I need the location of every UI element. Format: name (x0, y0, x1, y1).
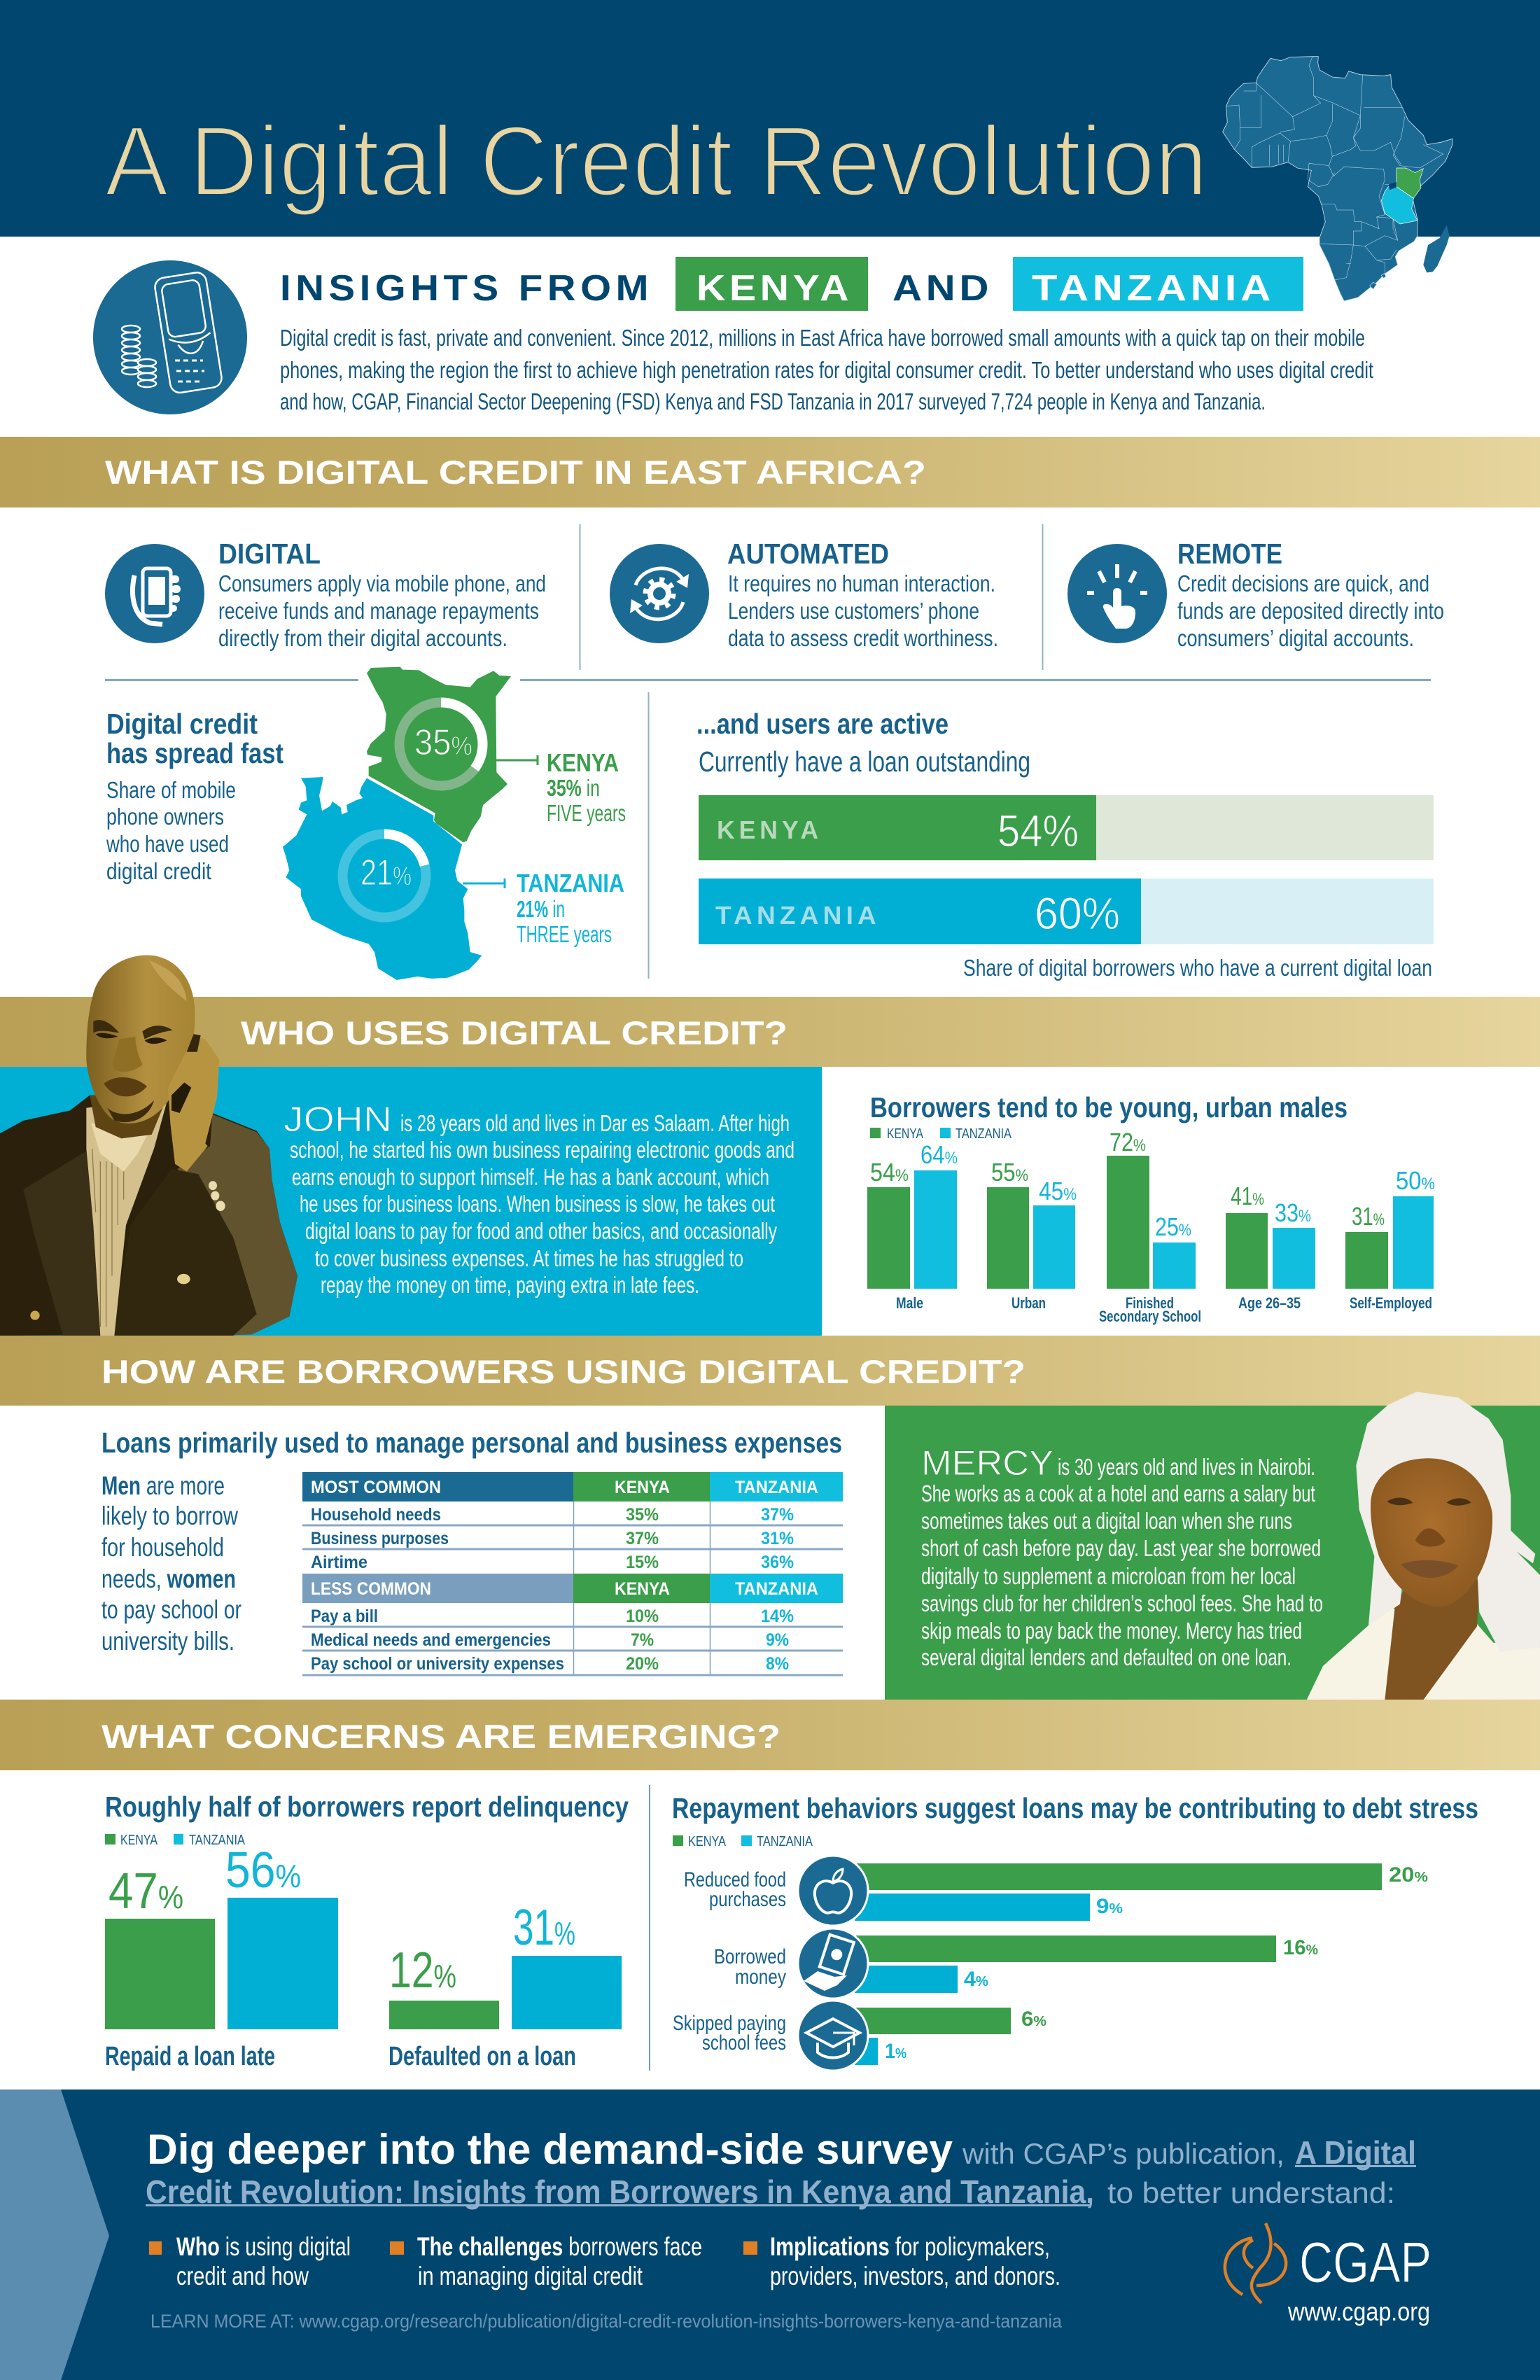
bullet: challenges: in managing digital credit (418, 2262, 643, 2290)
bars: Age 26-35: 41% (1231, 1182, 1264, 1210)
bullet: implications: providers, investors, and donors. (770, 2262, 1060, 2290)
footer heading: Dig deeper into the demand-side survey (147, 2126, 953, 2173)
row: medical needs: Medical needs and emergencies (311, 1630, 551, 1650)
panel: Mercy story: is 30 years old and lives in Nairobi. (1058, 1454, 1315, 1480)
bars: Finished secondary school: Secondary School (1099, 1308, 1201, 1325)
bars: borrowed money: 16% (1283, 1936, 1318, 1959)
legend (673, 1834, 813, 1849)
bar: Kenya 54% (699, 795, 1434, 860)
row: pay school: Pay school or university expenses (311, 1654, 564, 1674)
bars: reduced food: purchases (709, 1888, 786, 1911)
chart: borrowers young urban male (867, 1091, 1435, 1325)
row: pay a bill: 10% (626, 1606, 659, 1626)
panel: automated: AUTOMATED (727, 538, 889, 570)
map highlight: Kenya (1396, 168, 1423, 198)
section band: what concerns: WHAT CONCERNS ARE EMERGING? (102, 1718, 780, 1755)
bar: Tanzania 60%: 60% (1035, 888, 1120, 939)
bars: Age 26-35: Age 26–35 (1238, 1294, 1301, 1312)
section band: what is digital credit (0, 437, 1540, 507)
row: pay a bill: Pay a bill (311, 1606, 378, 1626)
bullet: who: credit and how (176, 2262, 309, 2290)
table: loan uses: KENYA (615, 1579, 670, 1599)
table: loan uses: TANZANIA (735, 1579, 818, 1599)
row: household needs: 35% (626, 1505, 659, 1525)
map: Africa (1223, 57, 1452, 301)
row: pay a bill (311, 1606, 794, 1626)
subtitle: insights from Kenya and Tanzania: AND (892, 268, 993, 309)
bars: skipped school fees: Skipped paying (673, 2012, 786, 2035)
text: men and women: for household (102, 1533, 224, 1562)
panel: Mercy story: several digital lenders and defaulted on one loan. (921, 1644, 1292, 1670)
bars: skipped school fees (673, 2001, 1046, 2071)
row: medical needs: 9% (766, 1630, 789, 1650)
table: loan uses: KENYA (615, 1478, 670, 1497)
bullet: who: Who is using digital (176, 2232, 351, 2261)
panel: Mercy story: She works as a cook at a hotel and earns a salary but (921, 1480, 1315, 1506)
bar: Kenya 54%: 54% (997, 806, 1079, 856)
chart: repayment behaviours (672, 1792, 1478, 2071)
panel: automated: data to assess credit worthiness. (728, 625, 998, 651)
bars: Male: 54% (870, 1158, 909, 1186)
bars: Self-employed (1345, 1166, 1435, 1312)
chart: borrowers young urban male: Borrowers tend to be young, urban males (870, 1091, 1348, 1124)
panel: digital: receive funds and manage repayments (218, 598, 539, 624)
footer heading: to better understand: (1107, 2176, 1395, 2209)
section band: what is digital credit: WHAT IS DIGITAL CREDIT IN EAST AFRICA? (105, 454, 926, 491)
photo: John (0, 955, 298, 1336)
panel: automated: It requires no human interaction. (728, 570, 995, 596)
bar: Tanzania 60%: TANZANIA (715, 901, 881, 930)
panel: digital: directly from their digital accounts. (218, 625, 507, 651)
panel: John story: school, he started his own business repairing electronic goods and (290, 1137, 794, 1163)
panel: John story: repay the money on time, paying extra in late fees. (321, 1272, 699, 1298)
legend (870, 1126, 1012, 1142)
heading: loans primarily used: Loans primarily used to manage personal and business expenses (102, 1427, 842, 1459)
panel: Mercy story: MERCY (921, 1443, 1054, 1483)
legend: TANZANIA (189, 1833, 246, 1848)
text: digital credit has spread fast: phone owners (106, 804, 224, 830)
chart: users are active (696, 708, 1434, 981)
row: business purposes: 31% (761, 1529, 794, 1548)
bars: Age 26-35 (1226, 1182, 1315, 1312)
row: household needs: 37% (761, 1505, 794, 1525)
row: business purposes (311, 1529, 794, 1548)
map: Kenya with donut (367, 667, 511, 842)
panel: John story: digital loans to pay for food and other basics, and occasionally (305, 1218, 777, 1244)
text: digital credit has spread fast (106, 708, 284, 884)
table: loan uses: MOST COMMON (311, 1478, 441, 1497)
bullet: who (149, 2232, 351, 2290)
chart: delinquency (105, 1791, 629, 2071)
bars: skipped school fees: 1% (885, 2040, 906, 2063)
legend: KENYA (887, 1126, 924, 1142)
intro text (280, 325, 1373, 414)
bars: reduced food (684, 1856, 1428, 1926)
icon: gear with arrows (610, 544, 709, 643)
bars: borrowed money: 4% (964, 1968, 988, 1991)
table: loan uses (302, 1472, 843, 1675)
callout: Kenya: FIVE years (547, 800, 626, 826)
row: business purposes: 37% (626, 1529, 659, 1548)
logo: CGAP (1225, 2223, 1432, 2326)
bars: Finished secondary school: 25% (1155, 1212, 1191, 1241)
footer heading: with CGAP’s publication, (962, 2137, 1284, 2170)
text: men and women: likely to borrow (102, 1502, 238, 1530)
row: household needs: Household needs (311, 1505, 441, 1525)
row: pay a bill: 14% (761, 1606, 794, 1626)
chart: delinquency: Roughly half of borrowers report delinquency (105, 1791, 629, 1823)
bars: Self-employed: 50% (1396, 1166, 1435, 1195)
table: loan uses: LESS COMMON (311, 1579, 431, 1599)
icon: apple (798, 1856, 868, 1926)
panel: Mercy story: short of cash before pay day. Last year she borrowed (921, 1535, 1321, 1561)
footer heading: Credit Revolution: Insights from Borrowers in Kenya and Tanzania, (146, 2174, 1094, 2210)
panel: automated: Lenders use customers’ phone (728, 598, 979, 624)
row: airtime: Airtime (311, 1553, 368, 1572)
legend: TANZANIA (757, 1834, 813, 1849)
photo: Mercy (1307, 1392, 1540, 1700)
subtitle: insights from Kenya and Tanzania: KENYA (696, 268, 853, 309)
logo: CGAP: www.cgap.org (1287, 2297, 1430, 2326)
row: business purposes: Business purposes (311, 1529, 449, 1548)
bars: defaulted: 31% (513, 1900, 575, 1956)
subtitle: insights from Kenya and Tanzania: TANZANIA (1032, 268, 1275, 309)
bars: Finished secondary school: Finished (1126, 1294, 1174, 1312)
bars: skipped school fees: school fees (702, 2031, 786, 2054)
map: Kenya with donut: 35% (414, 722, 472, 763)
text: digital credit has spread fast: has spread fast (106, 737, 284, 769)
text: men and women: university bills. (102, 1627, 234, 1656)
section band: who uses digital credit: WHO USES DIGITAL CREDIT? (241, 1014, 788, 1051)
row: airtime (311, 1553, 794, 1572)
arrow (0, 2090, 109, 2380)
callout: Kenya: 35% in (547, 775, 600, 801)
chart: users are active: Share of digital borrowers who have a current digital loan (963, 955, 1432, 981)
footer heading: A Digital (1295, 2134, 1416, 2171)
bars: borrowed money: Borrowed (714, 1945, 786, 1968)
panel: automated (610, 538, 998, 651)
panel: remote: REMOTE (1177, 538, 1282, 570)
bars: Age 26-35: 33% (1275, 1198, 1311, 1227)
bars: reduced food: 20% (1389, 1863, 1428, 1886)
bars: repaid late: Repaid a loan late (105, 2042, 275, 2071)
bars: Male: Male (896, 1294, 923, 1312)
panel: remote: consumers’ digital accounts. (1177, 625, 1414, 651)
panel: Mercy story: skip meals to pay back the money. Mercy has tried (921, 1618, 1302, 1644)
row: medical needs (311, 1630, 789, 1650)
bars: borrowed money (714, 1928, 1318, 1998)
panel: Mercy story: savings club for her children’s school fees. She had to (921, 1590, 1323, 1616)
bars: Male: 64% (920, 1140, 958, 1169)
bullet: implications (743, 2232, 1060, 2290)
bars: borrowed money: money (735, 1966, 786, 1989)
row: airtime: 15% (626, 1553, 659, 1572)
row: airtime: 36% (761, 1553, 794, 1572)
section band: what concerns (0, 1700, 1540, 1770)
header banner (0, 0, 1540, 237)
bars: defaulted: 12% (389, 1942, 456, 1998)
callout: Tanzania: 21% in (517, 896, 565, 922)
panel: John story: is 28 years old and lives in Dar es Salaam. After high (400, 1110, 790, 1136)
map: Tanzania with donut: 21% (360, 853, 412, 893)
panel: John story: JOHN (284, 1100, 392, 1139)
bars: repaid late: 56% (225, 1842, 301, 1898)
row: medical needs: 7% (631, 1630, 654, 1650)
text: digital credit has spread fast: Share of mobile (106, 777, 236, 803)
footer panel (0, 2090, 1540, 2380)
text: digital credit has spread fast: Digital credit (106, 708, 258, 740)
section band: how are borrowers using (0, 1336, 1540, 1406)
callout: Tanzania: THREE years (517, 921, 612, 947)
text: digital credit has spread fast: who have used (106, 831, 229, 857)
map highlight: Tanzania (1381, 187, 1418, 224)
text: digital credit has spread fast: digital credit (106, 858, 211, 884)
title: A Digital Credit Revolution (105, 106, 1208, 217)
panel: John story: he uses for business loans. When business is slow, he takes out (300, 1191, 775, 1217)
legend: KENYA (120, 1833, 158, 1848)
bar: Kenya 54%: KENYA (717, 816, 822, 844)
bars: defaulted (388, 1900, 622, 2071)
callout: Tanzania (463, 869, 624, 947)
map: Tanzania with donut (283, 777, 482, 980)
bars: Urban: Urban (1011, 1294, 1046, 1312)
callout: Kenya: KENYA (547, 748, 619, 777)
bars: defaulted: Defaulted on a loan (388, 2042, 576, 2071)
text: men and women: to pay school or (102, 1595, 241, 1624)
chart: users are active: ...and users are active (696, 708, 948, 740)
panel: John story (0, 1067, 822, 1336)
subtitle: insights from Kenya and Tanzania (280, 257, 1303, 311)
bars: Self-employed: 31% (1352, 1202, 1385, 1231)
logo: CGAP: CGAP (1299, 2231, 1432, 2295)
bars: repaid late (105, 1842, 338, 2071)
table: loan uses: TANZANIA (735, 1478, 818, 1497)
panel: Mercy story: digitally to supplement a microloan from her local (921, 1563, 1296, 1589)
legend: KENYA (688, 1834, 727, 1849)
learn more link: LEARN MORE AT: www.cgap.org/research/publication/digital-credit-revolution-insights-borrowers-kenya-and-tanzania (150, 2311, 1063, 2332)
row: pay school: 8% (766, 1654, 789, 1674)
section band: who uses digital credit (0, 997, 1540, 1067)
bullet: implications: Implications for policymakers, (770, 2232, 1050, 2261)
chart: users are active: Currently have a loan outstanding (699, 746, 1030, 778)
text: men and women (102, 1471, 241, 1656)
row: pay school: 20% (626, 1654, 659, 1674)
panel: Mercy story (885, 1406, 1540, 1700)
bars: Male (867, 1140, 958, 1312)
icon: mobile phone and coins (93, 260, 247, 414)
bars: Self-employed: Self-Employed (1350, 1294, 1432, 1312)
bars: Finished secondary school (1099, 1128, 1201, 1325)
panel: Mercy story: sometimes takes out a digital loan when she runs (921, 1508, 1292, 1534)
bars: Finished secondary school: 72% (1110, 1128, 1146, 1156)
callout: Tanzania: TANZANIA (517, 869, 624, 897)
bars: Urban: 55% (991, 1158, 1028, 1186)
panel: digital: Consumers apply via mobile phone, and (218, 570, 546, 596)
bars: reduced food: Reduced food (684, 1868, 786, 1891)
callout: Kenya (496, 748, 626, 826)
bars: Urban (987, 1158, 1077, 1312)
panel: digital (105, 538, 546, 651)
section band: how are borrowers using: HOW ARE BORROWERS USING DIGITAL CREDIT? (102, 1353, 1026, 1390)
panel: John story: to cover business expenses. At times he has struggled to (315, 1245, 743, 1271)
bars: reduced food: 9% (1096, 1895, 1123, 1918)
bullet: challenges: The challenges borrowers face (417, 2232, 702, 2261)
bars: skipped school fees: 6% (1021, 2008, 1046, 2031)
subtitle: insights from Kenya and Tanzania: INSIGHTS FROM (280, 268, 653, 309)
bars: Urban: 45% (1039, 1177, 1077, 1205)
icon: money in hand (798, 1928, 868, 1998)
panel: John story: earns enough to support himself. He has a bank account, which (292, 1164, 769, 1190)
bars: repaid late: 47% (108, 1863, 183, 1919)
legend: TANZANIA (955, 1126, 1012, 1142)
panel: remote: Credit decisions are quick, and (1177, 570, 1429, 596)
footer heading (146, 2126, 1416, 2210)
row: household needs (311, 1505, 794, 1525)
bullet: challenges (390, 2232, 702, 2290)
row: pay school (311, 1654, 789, 1674)
panel: digital: DIGITAL (218, 538, 321, 570)
icon: graduation cap (798, 2001, 868, 2071)
text: men and women: needs, women (102, 1564, 236, 1593)
icon: hand holding phone (105, 544, 204, 643)
panel: remote: funds are deposited directly into (1177, 598, 1444, 624)
legend (105, 1833, 246, 1848)
panel: remote (1068, 538, 1444, 651)
bar: Tanzania 60% (699, 878, 1434, 944)
text: men and women: Men are more (102, 1471, 225, 1500)
icon: finger tap (1068, 544, 1167, 643)
